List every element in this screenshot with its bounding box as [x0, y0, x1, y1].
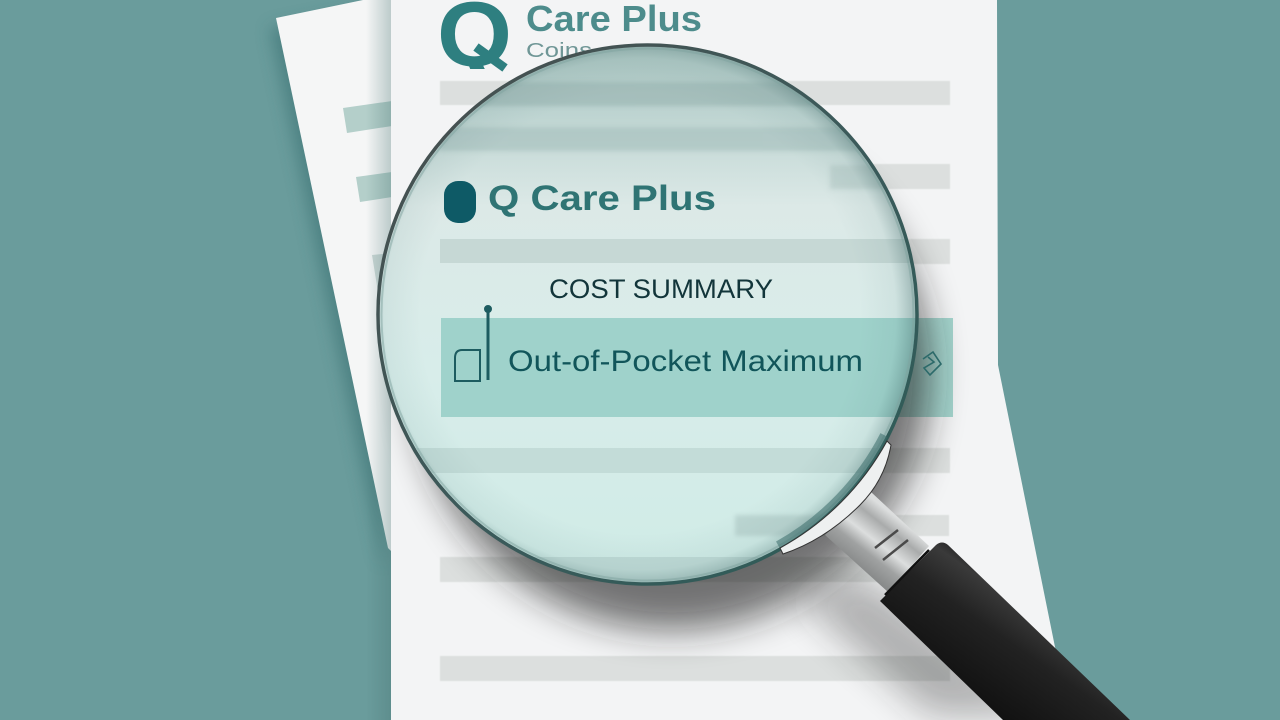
lens placeholder bars: [480, 82, 814, 106]
lens rim: [378, 45, 917, 584]
magnifier lens: [375, 45, 935, 584]
magnifier handle: [825, 492, 1130, 720]
lens glass: [380, 46, 916, 582]
metal ferrule: [825, 492, 929, 592]
front paper sheet: [366, 0, 1075, 720]
small icon at row right: [923, 352, 941, 375]
magnified contents: [375, 46, 935, 582]
lens edge vignette: [380, 46, 916, 582]
lens highlighted row: [441, 318, 921, 417]
row icon: document with pin: [455, 306, 491, 381]
back paper sheet: [270, 0, 392, 562]
logo subtext: Coins: [526, 40, 592, 62]
highlighted row: [441, 318, 953, 417]
cost summary heading: COST SUMMARY: [549, 274, 773, 304]
silver collar on rim: [780, 441, 891, 554]
paper placeholder lines: [440, 81, 950, 681]
back sheet bars: [343, 101, 392, 292]
rim inner highlight: [382, 48, 914, 580]
lens logo pill: [444, 181, 476, 223]
infographic scene: [268, 0, 1130, 720]
logo: Q Care Plus: [440, 2, 700, 72]
shadow cast by magnifier: [414, 114, 1050, 715]
lens heading: Q Care Plus: Q Care Plus: [488, 179, 716, 218]
black grip: [880, 542, 1130, 720]
logo Q tail stroke: [476, 47, 505, 68]
ferrule grooves: [875, 530, 908, 560]
row label: Out-of-Pocket Maximum: [508, 345, 863, 378]
dark band inside rim near collar: [778, 435, 884, 545]
